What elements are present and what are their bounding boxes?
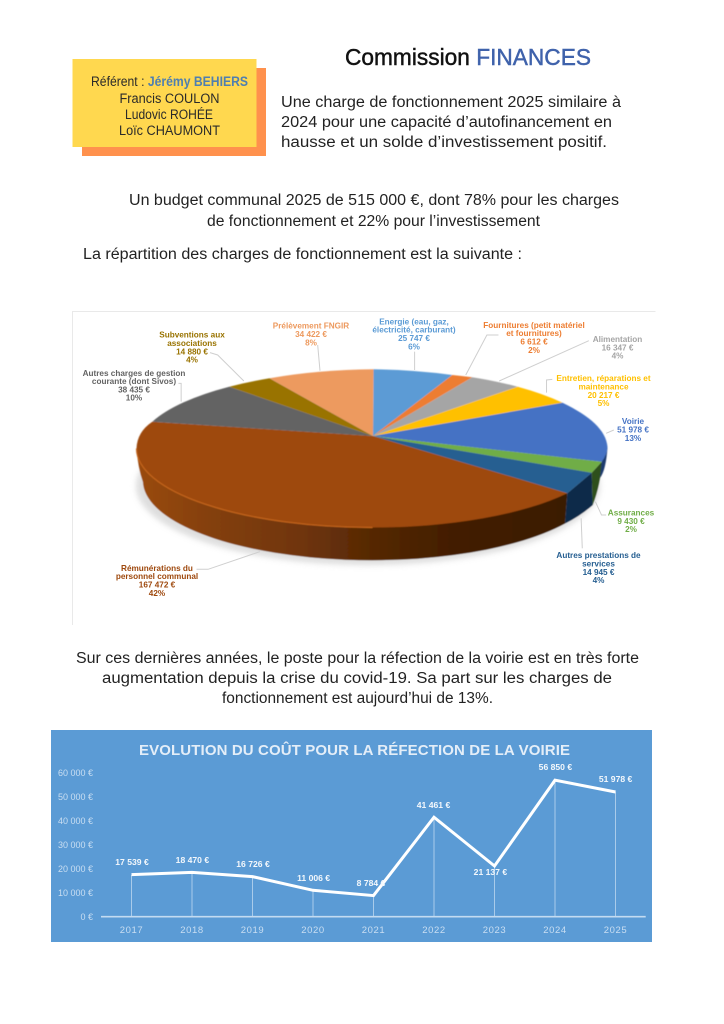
x axis labels: 2020 (301, 925, 325, 936)
label: Rémunérations: personnel communal (116, 572, 198, 581)
pie slice: Rémunérations (136, 422, 567, 528)
x axis labels: 2025 (604, 925, 627, 936)
text block: introduction: Une charge de fonctionnement 2025 similaire à (281, 94, 621, 111)
label: Rémunérations: 42% (149, 589, 166, 598)
pie slice: Autres prestations (373, 436, 592, 493)
y axis labels (58, 768, 93, 922)
data labels: 41 461 € (417, 800, 450, 810)
pie 3D (136, 369, 608, 565)
label: Assurances (608, 508, 655, 534)
y axis labels: 60 000 € (58, 768, 93, 778)
text block: introduction: 2024 pour une capacité d’autofinancement en (281, 114, 612, 131)
x axis labels: 2019 (241, 925, 264, 936)
label: Voirie: 13% (625, 434, 642, 443)
label: Autres prestations: 4% (593, 576, 605, 585)
chart title: EVOLUTION DU COÛT POUR LA RÉFECTION DE LA VOIRIE (139, 741, 570, 759)
label: Fournitures: 2% (528, 346, 541, 355)
text block: budget communal: de fonctionnement et 22% pour l’investissement (207, 213, 541, 230)
text block: budget communal (129, 192, 619, 230)
label: Entretien (556, 374, 651, 408)
label: Alimentation: 4% (612, 352, 624, 360)
label: Fournitures: 6 612 € (520, 338, 548, 346)
text: référent et membres (91, 74, 248, 138)
pie slice: Entretien (373, 387, 562, 436)
label: Prélèvement FNGIR: 34 422 € (295, 330, 327, 339)
data labels: 56 850 € (539, 762, 572, 772)
pie slice: Autres charges (152, 387, 373, 436)
text block: voirie: Sur ces dernières années, le poste pour la réfection de la voirie est en très forte (76, 650, 639, 667)
label: Énergie: électricité, carburant) (372, 326, 456, 334)
pie labels (83, 318, 655, 598)
label: Entretien: 20 217 € (588, 391, 620, 400)
label: Assurances: 9 430 € (617, 517, 645, 526)
label: Autres charges: Autres charges de gestion (83, 369, 185, 378)
label: Autres charges (83, 369, 185, 402)
title: Commission FINANCES (345, 44, 591, 70)
text block: voirie: fonctionnement est aujourd’hui de 13%. (222, 690, 493, 707)
label: Prélèvement FNGIR: 8% (305, 338, 318, 348)
data labels: 21 137 € (474, 867, 507, 877)
panel: pie chart (72, 311, 656, 626)
text: référent et membres: Ludovic ROHÉE (125, 107, 213, 122)
x axis labels: 2021 (362, 925, 385, 936)
x axis (101, 916, 646, 918)
label: Énergie: Energie (eau, gaz, (379, 318, 449, 326)
text block: voirie (76, 650, 639, 707)
label: Autres charges: 10% (126, 394, 143, 402)
label: Assurances: 2% (625, 525, 638, 534)
label: Rémunérations: 167 472 € (139, 580, 176, 590)
label: Autres prestations: Autres prestations de (556, 551, 641, 560)
label: Prélèvement FNGIR: Prélèvement FNGIR (273, 322, 349, 330)
text: référent et membres: Francis COULON (120, 91, 220, 106)
y axis labels: 20 000 € (58, 864, 93, 874)
x axis labels: 2023 (483, 925, 506, 936)
label: Autres charges: 38 435 € (118, 386, 150, 394)
label: Énergie (372, 318, 456, 352)
text block: introduction (281, 94, 621, 151)
label: Fournitures: et fournitures) (506, 329, 562, 338)
pie slice: Fournitures (373, 375, 472, 436)
label: Énergie: 6% (408, 342, 421, 352)
y axis labels: 50 000 € (58, 792, 93, 802)
y axis labels: 10 000 € (58, 888, 93, 898)
pie wall (136, 448, 567, 560)
text block: répartition: La répartition des charges de fonctionnement est la suivante : (83, 246, 522, 263)
x axis labels: 2017 (120, 925, 143, 936)
label: Autres prestations: 14 945 € (583, 568, 615, 577)
panel: line chart (51, 730, 652, 942)
text block: introduction: hausse et un solde d’investissement positif. (281, 134, 607, 151)
panel: référents (72, 59, 266, 156)
label: Assurances: Assurances (608, 508, 655, 518)
label: Entretien: maintenance (578, 382, 629, 392)
label: Fournitures (483, 321, 585, 355)
label: Voirie: Voirie (622, 417, 645, 426)
label: Autres prestations: services (582, 560, 615, 568)
text block: budget communal: Un budget communal 2025 de 515 000 €, dont 78% pour les charges (129, 192, 619, 209)
pie slice: Énergie (373, 369, 452, 436)
label: Énergie: 25 747 € (398, 334, 430, 343)
text: référent et membres: Loïc CHAUMONT (119, 123, 220, 138)
text: référent et membres: Référent : Jérémy BEHIERS (91, 74, 248, 89)
label: Rémunérations (116, 564, 198, 598)
label: Autres prestations (556, 551, 641, 585)
x axis labels (120, 925, 627, 936)
pie slice: Alimentation (373, 377, 518, 436)
pie slice: Assurances (373, 436, 602, 473)
x axis labels: 2024 (543, 925, 567, 936)
data labels: 16 726 € (236, 859, 270, 869)
label: Subventions: 14 880 € (176, 348, 208, 356)
label: Fournitures: Fournitures (petit matériel (483, 321, 585, 330)
text block: voirie: augmentation depuis la crise du covid-19. Sa part sur les charges de (102, 670, 612, 687)
drop lines (132, 780, 616, 916)
data labels: 8 784 € (357, 878, 386, 888)
label: Prélèvement FNGIR (273, 322, 349, 348)
data labels: 17 539 € (115, 857, 149, 867)
data labels: 11 006 € (297, 873, 330, 883)
data labels: 51 978 € (599, 774, 633, 784)
label: Autres charges: courante (dont Sivos) (92, 377, 176, 386)
label: Subventions: 4% (186, 356, 199, 364)
data labels: 18 470 € (176, 855, 209, 865)
label: Alimentation (593, 335, 642, 360)
label: Alimentation: 16 347 € (602, 344, 634, 352)
x axis labels: 2022 (422, 925, 446, 936)
data labels (115, 762, 633, 888)
label: Voirie (617, 417, 649, 443)
y axis labels: 40 000 € (58, 816, 93, 826)
label: Rémunérations: Rémunérations du (121, 564, 193, 573)
label: Subventions: associations (167, 339, 217, 348)
label: Voirie: 51 978 € (617, 426, 649, 434)
pie slice: Voirie (373, 403, 608, 462)
pie slice: Prélèvement (270, 369, 374, 436)
label: Entretien: 5% (598, 399, 610, 408)
label: Subventions: Subventions aux (159, 330, 225, 340)
pie slice: Subventions (229, 378, 373, 436)
x axis labels: 2018 (180, 925, 204, 936)
leader lines (178, 335, 614, 569)
data line (132, 780, 616, 896)
label: Entretien: Entretien, réparations et (556, 374, 651, 383)
y axis labels: 0 € (80, 912, 93, 922)
y axis labels: 30 000 € (58, 840, 93, 850)
label: Subventions (159, 330, 225, 364)
label: Alimentation: Alimentation (593, 335, 642, 344)
